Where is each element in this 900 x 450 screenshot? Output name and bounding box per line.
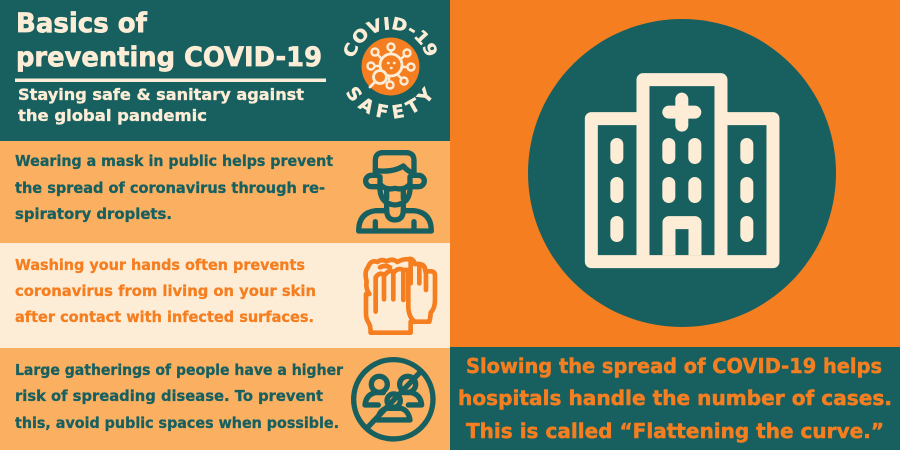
icon: person with mask — [359, 153, 431, 231]
icon: no gatherings — [354, 360, 433, 439]
icon: soapy hands — [366, 259, 435, 333]
text: gatherings: this, avoid public spaces when possible. — [15, 414, 339, 432]
title — [16, 8, 322, 73]
text: flattening the curve — [458, 354, 892, 443]
text: hands: Washing your hands often prevents — [15, 256, 305, 274]
text: flattening the curve: This is called “Flattening the curve.” — [466, 419, 884, 443]
text: mask — [15, 152, 333, 223]
subtitle: the global pandemic — [18, 106, 207, 125]
text: gatherings: risk of spreading disease. To prevent — [15, 387, 323, 405]
title: Basics of — [16, 8, 147, 39]
text: mask: Wearing a mask in public helps prevent — [15, 152, 333, 170]
panel: flattening the curve — [450, 347, 900, 450]
panel: hand washing advice — [0, 243, 450, 348]
title: preventing COVID-19 — [16, 42, 322, 73]
text: hands: after contact with infected surfaces. — [15, 308, 314, 326]
text: gatherings — [15, 361, 344, 432]
text: gatherings: Large gatherings of people have a higher — [15, 361, 344, 379]
icon: virus under magnifier — [368, 44, 414, 88]
subtitle: Staying safe & sanitary against — [18, 85, 304, 104]
text: mask: spiratory droplets. — [15, 205, 172, 223]
text: mask: the spread of coronavirus through re- — [15, 179, 325, 197]
panel: gatherings advice — [0, 348, 450, 450]
badge: COVID-19 safety — [344, 16, 437, 119]
badge: COVID-19 safety: SAFETY — [346, 86, 432, 119]
panel: mask advice — [0, 141, 450, 243]
badge: COVID-19 safety: COVID-19 — [344, 16, 437, 56]
text: hands: coronavirus from living on your skin — [15, 282, 316, 300]
text: hands — [15, 256, 316, 326]
text: flattening the curve: Slowing the spread of COVID-19 helps — [466, 354, 882, 378]
text: flattening the curve: hospitals handle the number of cases. — [458, 386, 892, 410]
subtitle — [18, 85, 304, 125]
icon: hospital — [591, 80, 773, 262]
panel: hospital illustration — [450, 0, 900, 347]
panel: header — [0, 0, 450, 141]
